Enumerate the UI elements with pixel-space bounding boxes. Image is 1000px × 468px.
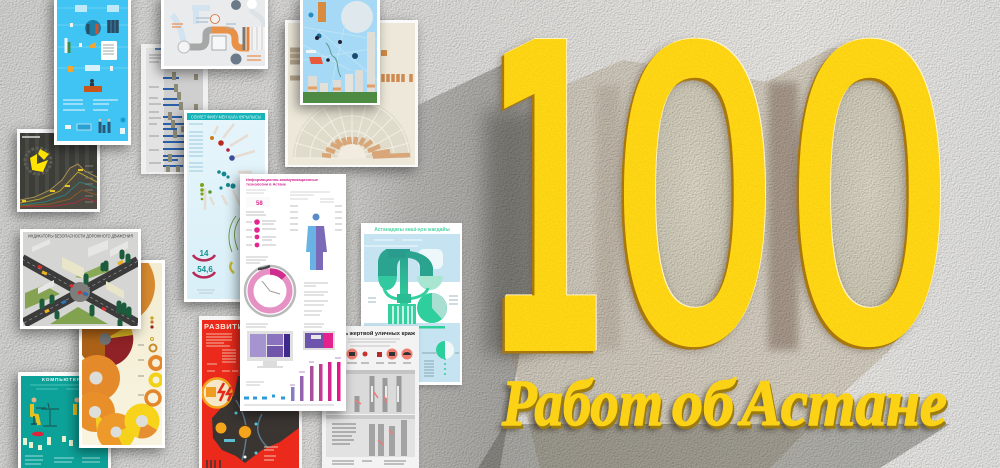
figures — [168, 72, 196, 172]
panel: red city development infographic: РАЗВИТИЕ СТОЛИЦЫ — [204, 322, 295, 331]
trees — [42, 252, 129, 327]
family — [100, 122, 109, 133]
panel: blue city infographic — [300, 0, 380, 105]
panel: road safety infographic — [20, 229, 141, 329]
heading: Астанадағы көші-қон жағдайы — [374, 226, 450, 233]
info cards — [62, 257, 84, 279]
green bar — [370, 326, 445, 328]
panel: light blue radial infographic: СӘУЛЕТ ФИЛУ МЕН ҚАЛА ҚҰРЫЛЫСЫ — [191, 115, 261, 120]
bars — [163, 78, 195, 166]
panel: pipes infographic — [161, 0, 268, 69]
panel: street theft infographic — [313, 326, 419, 468]
weights — [231, 0, 241, 10]
stat gauges — [193, 249, 215, 277]
stat gauges: 14 — [200, 249, 209, 258]
band with figures 1 — [326, 370, 415, 414]
pale figures — [23, 436, 73, 450]
panel: computer health infographic — [18, 372, 123, 468]
band with figures 2 — [326, 415, 415, 457]
subtitle: Работ — [501, 367, 663, 440]
panel: blue procedures infographic — [54, 0, 131, 145]
title: ИНДИКАТОРЫ БЕЗОПАСНОСТИ ДОРОЖНОГО ДВИЖЕНИЯ — [28, 234, 133, 238]
dots — [210, 136, 214, 140]
panel: computer health infographic: КОМПЬЮТЕР И ЗДОРОВЬЕ — [42, 377, 123, 383]
subtitle: об — [672, 367, 737, 440]
panel: beige fan infographic — [285, 20, 418, 167]
subtitle: Астане — [737, 367, 947, 440]
panel: ICT infographic: 58 — [256, 201, 263, 207]
panel: light blue radial infographic — [184, 110, 268, 302]
orange pipe — [212, 30, 249, 48]
donut clock — [245, 266, 295, 316]
panel: orange circles infographic — [74, 245, 165, 451]
panel: ICT infographic: технологии в Астане — [246, 182, 287, 186]
seated figures — [32, 404, 39, 425]
row of figures — [383, 74, 411, 82]
roads — [22, 259, 138, 324]
institution icons — [75, 5, 87, 12]
white document — [101, 41, 117, 60]
monitor treemap — [246, 324, 335, 368]
people — [85, 20, 101, 36]
map circle — [341, 1, 373, 33]
heading: Информационно-коммуникационные — [246, 177, 319, 182]
grey pipe — [186, 30, 221, 47]
lawns — [25, 285, 60, 309]
title number 100 — [484, 0, 948, 453]
header — [187, 113, 265, 120]
small rings — [150, 357, 162, 369]
panel: red city development infographic — [199, 316, 302, 468]
green lines fan — [228, 216, 240, 252]
buildings — [367, 32, 375, 92]
dark map — [212, 376, 299, 463]
panel: ICT infographic — [240, 174, 346, 411]
sankey flow — [378, 249, 447, 324]
stat gauges: 54,6 — [197, 265, 213, 274]
body figure — [306, 214, 327, 270]
fan bars — [322, 137, 410, 156]
panel: grey bars infographic — [141, 44, 208, 174]
pink dots — [254, 219, 260, 225]
pie chart — [82, 329, 134, 365]
panel: migration infographic — [361, 223, 462, 385]
bar chart — [290, 358, 341, 401]
subtitle — [501, 367, 947, 440]
icons row — [346, 348, 412, 360]
map rivers — [236, 400, 268, 460]
fan chart — [293, 99, 411, 158]
big circle — [141, 263, 155, 316]
small blue icons — [244, 396, 285, 398]
text block — [290, 50, 302, 78]
lightning callout — [202, 378, 232, 408]
cars — [38, 262, 122, 312]
heading: Как не стать жертвой уличных краж — [313, 330, 416, 337]
yellow arrows icon — [25, 148, 51, 174]
radial rays — [205, 124, 255, 210]
radiator — [246, 27, 265, 50]
desk — [90, 79, 94, 83]
panel: dark chart infographic — [17, 129, 100, 212]
crossroad — [70, 282, 90, 302]
red oval — [32, 432, 44, 436]
half donut — [436, 341, 445, 359]
